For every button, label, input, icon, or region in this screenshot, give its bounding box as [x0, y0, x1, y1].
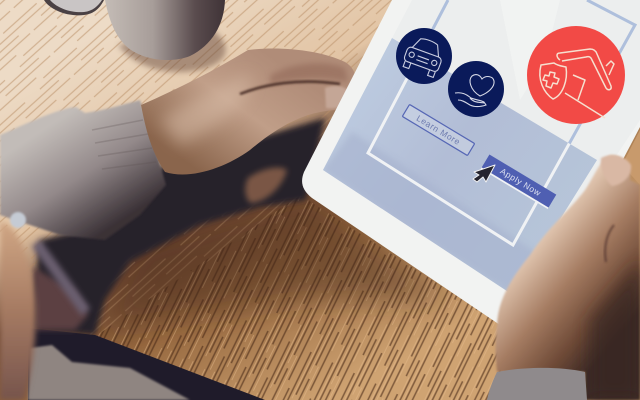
button: apply now: Apply Now — [498, 166, 543, 198]
tablet — [302, 0, 640, 325]
dark strap and lower sleeve — [28, 328, 265, 400]
button: learn more — [402, 104, 475, 156]
icon: house and shield — [540, 49, 614, 118]
tablet screen — [323, 0, 640, 295]
icon: heart in hand badge — [448, 61, 504, 117]
blurred foreground hand — [0, 222, 36, 400]
tablet white frame — [302, 0, 640, 325]
wood at right of tablet — [625, 130, 640, 184]
icon: car badge — [396, 28, 452, 84]
button: apply now — [481, 154, 556, 208]
outline white over band — [366, 78, 570, 247]
icon: car — [402, 38, 442, 78]
blurred glasses arm — [33, 243, 88, 330]
icon: heart and hand — [455, 75, 494, 106]
icon: mouse cursor arrow — [473, 165, 495, 182]
right sleeve cuff — [487, 368, 587, 400]
spoon at top edge — [44, 0, 104, 15]
left sleeve — [0, 100, 166, 240]
icon: red home and health badge — [527, 26, 625, 124]
button: learn more: Learn More — [415, 113, 462, 147]
left hand — [141, 48, 355, 203]
shadow under left hand and sleeve — [30, 118, 325, 335]
right hand — [496, 155, 640, 400]
blue content band — [323, 38, 597, 295]
screen outline rectangle — [431, 0, 637, 144]
coffee mug — [105, 0, 226, 72]
